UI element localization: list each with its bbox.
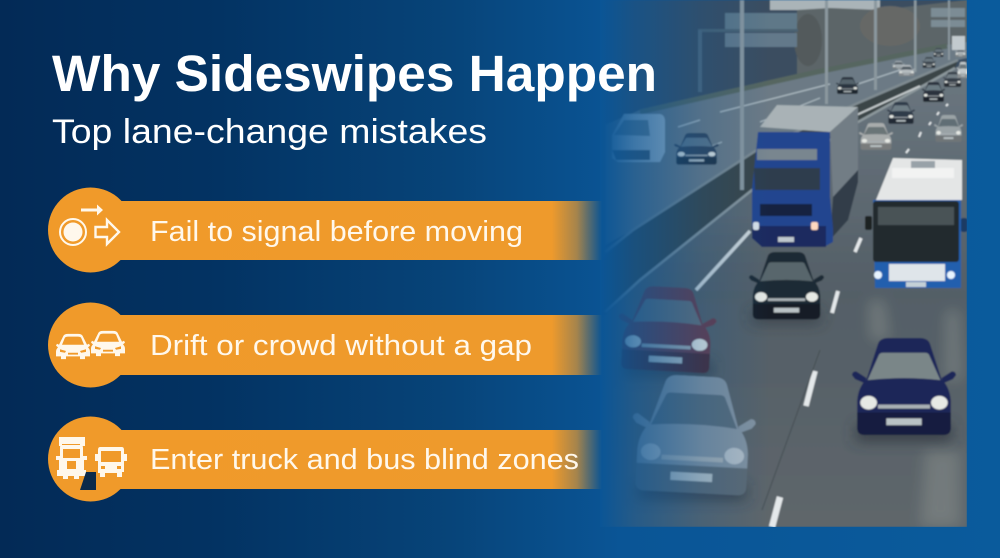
badge circle 2	[48, 302, 133, 388]
street lamps	[740, 0, 950, 190]
blue car	[852, 338, 956, 435]
item 1: fail to signal	[48, 188, 602, 272]
truck	[752, 105, 858, 247]
silver car	[629, 373, 758, 496]
photo: highway traffic	[600, 0, 969, 527]
road sheen	[868, 300, 962, 527]
icon: signal light and arrows	[60, 204, 119, 245]
far carriageway	[605, 42, 967, 245]
far guard rail	[640, 46, 947, 112]
icon: truck and bus	[56, 437, 127, 490]
icon: two cars	[56, 331, 125, 359]
maroon car	[616, 284, 718, 374]
orange bar 1	[100, 201, 602, 260]
black car	[749, 252, 824, 319]
badge circle 1	[48, 188, 133, 272]
label 3: Enter truck and bus blind zones	[150, 444, 579, 476]
item 2: drift or crowd	[48, 302, 602, 388]
orange bar 3	[100, 430, 602, 489]
road edge line	[696, 231, 750, 290]
far road markings	[678, 70, 900, 155]
orange bar 2	[100, 315, 602, 375]
main carriageway	[600, 62, 967, 527]
near-lane cars	[859, 62, 969, 150]
car shadows	[622, 312, 952, 499]
trees and sky	[600, 0, 967, 330]
label 2: Drift or crowd without a gap	[150, 330, 532, 362]
title: Why Sideswipes Happen	[52, 45, 657, 102]
item 3: blind zones	[48, 416, 602, 502]
bus	[865, 158, 967, 288]
badge circle 3	[48, 416, 133, 502]
subtitle: Top lane-change mistakes	[52, 113, 487, 151]
photo blend overlay	[600, 0, 770, 527]
blind zone wedge	[80, 472, 96, 490]
far road cars	[836, 36, 966, 94]
white van	[612, 114, 665, 162]
label 1: Fail to signal before moving	[150, 216, 523, 248]
overhead sign gantry	[698, 8, 965, 92]
median barrier	[600, 60, 958, 320]
lane dashes	[772, 104, 948, 527]
